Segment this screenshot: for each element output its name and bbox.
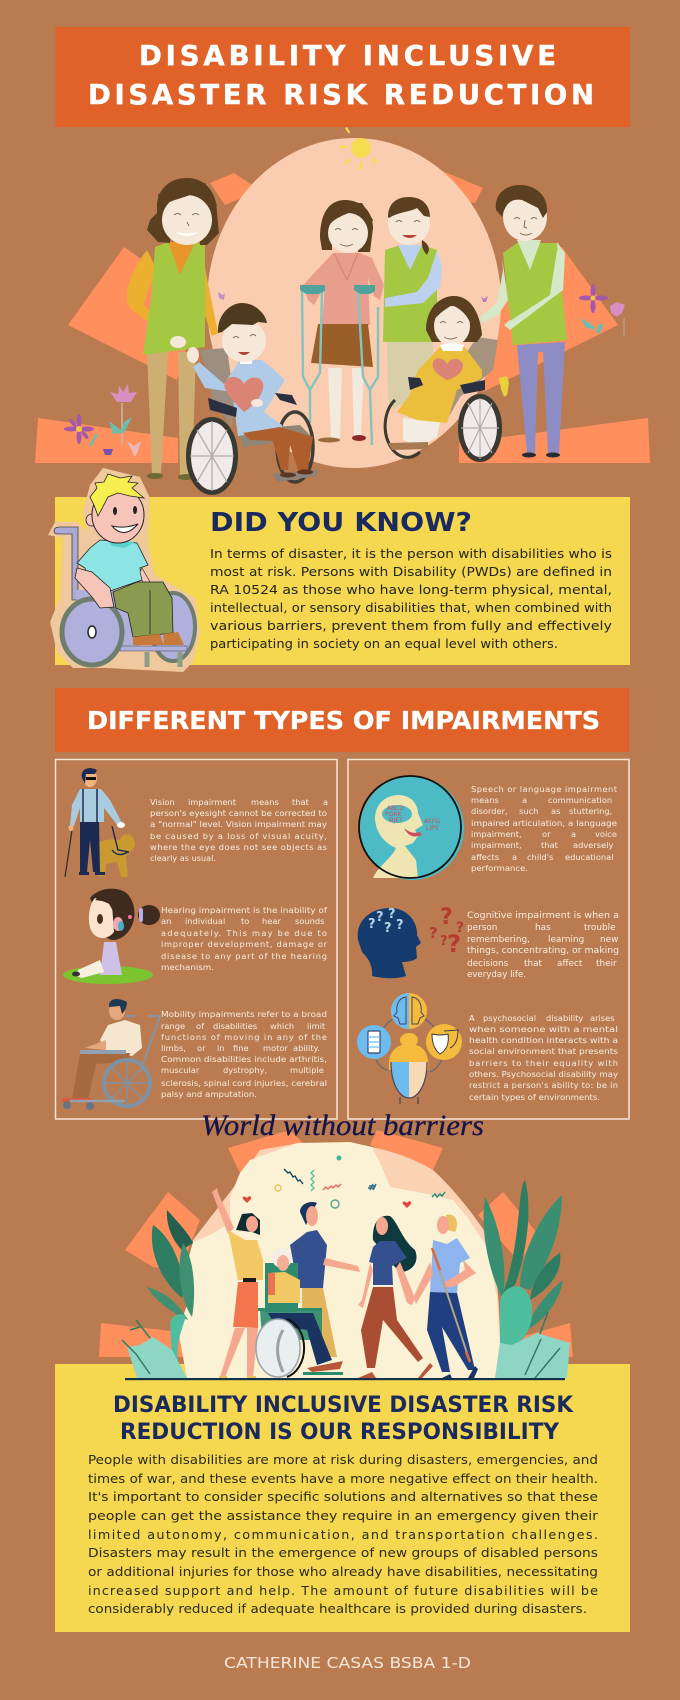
title banner: DISABILITY INCLUSIVE (139, 40, 556, 72)
vision impairment text: clearly as usual. (150, 853, 216, 863)
icon: psychosocial disability head with circles (357, 993, 462, 1104)
hearing impairment text: hear (262, 916, 281, 926)
speech impairment text: performance. (471, 863, 528, 873)
sunburst rays (35, 170, 650, 463)
cognitive impairment text (467, 911, 619, 980)
speech impairment text (471, 784, 618, 873)
psychosocial disability text: disability (546, 1013, 583, 1023)
vision impairment text: impairment (188, 797, 237, 807)
mobility impairment text (161, 1009, 327, 1099)
speech impairment text: communication (548, 795, 612, 805)
responsibility body text: People with disabilities are more at risk during disasters, emergencies, and (88, 1453, 598, 1468)
icon: head with question marks (358, 905, 464, 978)
psychosocial disability text: certain types of environments. (469, 1092, 600, 1102)
speech impairment text: adversely (573, 840, 614, 850)
hearing impairment text: sounds (295, 916, 325, 926)
hearing impairment text: individual (185, 916, 225, 926)
did you know panel (55, 497, 630, 665)
did you know body text: In terms of disaster, it is the person with disabilities who is (210, 547, 612, 561)
peach background shape (187, 1143, 500, 1378)
figure: child in wheelchair with heart (187, 303, 318, 492)
did you know body text: various barriers, prevent them from fully and effectively (210, 619, 612, 633)
left plants (147, 1210, 194, 1320)
icon: speech head in circle (359, 776, 464, 880)
icon: speech head in circle: ABCD (387, 805, 404, 812)
icon: speech head in circle: AEFG (424, 818, 440, 825)
speech impairment text: means (471, 795, 499, 805)
responsibility body text: limited autonomy, communication, and transportation challenges. (88, 1528, 598, 1543)
figure: girl in wheelchair with heart (385, 296, 500, 460)
did you know body text: most at risk. Persons with Disability (PWDs) are defined in (210, 565, 612, 579)
icon: girl with hearing aid (63, 889, 160, 984)
responsibility body text: times of war, and these events have a more negative effect on their health. (88, 1472, 598, 1487)
speech impairment text: as (551, 806, 560, 816)
speech impairment text: voice (595, 829, 617, 839)
icon: head with question marks: ? (447, 930, 461, 958)
icon: head with question marks: ? (440, 905, 453, 930)
mobility impairment text: Common disabilities include arthritis, (161, 1054, 327, 1064)
hearing impairment text: adequately. This may be due to (161, 928, 327, 938)
responsibility body text: or additional injuries for those who already have disabilities, necessitating (88, 1565, 598, 1580)
icon: head with question marks: ? (456, 920, 464, 936)
responsibility body text: It's important to consider specific solutions and alternatives so that these (88, 1490, 598, 1505)
cognitive impairment text: Cognitive impairment is when a (467, 911, 619, 921)
bottom illustration: inclusive group of friends (99, 1130, 573, 1380)
psychosocial disability text: A (469, 1013, 475, 1023)
icon: blind man with guide dog and cane (65, 768, 135, 877)
woman with long hair (358, 1216, 433, 1378)
did you know body text: participating in society on an equal level with others. (210, 637, 558, 651)
author credit: CATHERINE CASAS BSBA 1-D (224, 1654, 471, 1672)
psychosocial disability text: health condition interacts with a (469, 1035, 618, 1045)
vision impairment text: a "normal" level. Vision impairment may (150, 819, 327, 829)
did you know heading: DID YOU KNOW? (210, 508, 472, 538)
confetti (275, 1169, 445, 1208)
psychosocial disability text: others. Psychosocial disability may (469, 1069, 618, 1079)
speech impairment text: Speech or language impairment (471, 784, 618, 794)
flowers (64, 284, 625, 457)
hearing impairment text: Hearing impairment is the inability of (161, 905, 328, 915)
cognitive impairment text: has (535, 923, 551, 933)
responsibility body text: increased support and help. The amount of future disabilities will be (88, 1584, 598, 1599)
cognitive impairment text: things, concentrating, or making (467, 946, 619, 956)
vision impairment text: where the eye does not see objects as (150, 842, 327, 852)
responsibility heading: DISABILITY INCLUSIVE DISASTER RISK (113, 1393, 574, 1418)
mobility impairment text: or (197, 1043, 206, 1053)
woman raising hand (212, 1188, 263, 1379)
hearing impairment text: improper development, damage or (161, 939, 328, 949)
cognitive impairment text: their (596, 959, 617, 969)
mobility impairment text: sclerosis, spinal cord injuries, cerebral (161, 1078, 327, 1088)
sunburst rays (99, 1130, 573, 1357)
mobility impairment text: fine (233, 1043, 249, 1053)
responsibility body text: people can get the assistance they require in an emergency given their (88, 1509, 599, 1524)
speech impairment text: disorder, (471, 806, 508, 816)
vision impairment text: Vision (150, 797, 175, 807)
vision impairment text: that (292, 797, 310, 807)
hearing impairment text: disease to any part of the hearing (161, 951, 327, 961)
did you know body text (210, 547, 612, 651)
icon: head with question marks: ? (384, 921, 392, 936)
speech impairment text: a (522, 795, 527, 805)
vision impairment text: be caused by a loss of visual acuity, (150, 831, 327, 841)
figure: man in green vest (480, 185, 567, 458)
cognitive impairment text: that (524, 959, 543, 969)
blond man with white cane (413, 1214, 478, 1378)
bottom yellow panel background (55, 1364, 630, 1632)
hearing impairment text: mechanism. (161, 962, 214, 972)
cognitive impairment text: new (600, 935, 618, 945)
psychosocial disability text (469, 1013, 618, 1102)
speech impairment text: impaired articulation, a language (471, 818, 617, 828)
panel: vision, hearing and mobility impairments (56, 760, 337, 1119)
psychosocial disability text: restrict a person's ability to: be in (469, 1080, 618, 1090)
icon: head with question marks: ? (368, 917, 376, 932)
responsibility body text (88, 1453, 599, 1617)
title banner (56, 27, 630, 127)
speech impairment text: child's (527, 852, 553, 862)
cognitive impairment text: everyday life. (467, 970, 526, 980)
icon: speech head in circle: LIPS (426, 825, 439, 832)
ground line (125, 1378, 565, 1380)
impairments heading banner (55, 688, 629, 752)
responsibility body text: considerably reduced if adequate healthcare is provided during disasters. (88, 1602, 587, 1617)
figure: woman in green vest (127, 178, 219, 480)
cognitive impairment text: person (467, 923, 497, 933)
icon: boy in wheelchair (48, 468, 200, 672)
did you know body text: intellectual, or sensory disabilities that, when combined with (210, 601, 612, 615)
peach oval (207, 138, 501, 468)
cognitive impairment text: affect (557, 959, 583, 969)
mobility impairment text: range (161, 1021, 185, 1031)
icon: head with question marks: ? (440, 934, 448, 949)
psychosocial disability text: psychosocial (483, 1013, 536, 1023)
mobility impairment text: ability. (293, 1043, 320, 1053)
mobility impairment text: palsy and amputation. (161, 1089, 257, 1099)
psychosocial disability text: social environment that presents (469, 1046, 618, 1056)
psychosocial disability text: arises (590, 1013, 615, 1023)
world without barriers caption: World without barriers (201, 1109, 484, 1142)
hearing impairment text: an (161, 916, 171, 926)
icon: head with question marks: ? (429, 924, 438, 942)
icon: speech head in circle: NJET (389, 817, 403, 824)
speech impairment text: affects (471, 852, 499, 862)
figure: volunteer in green vest with blue shirt (383, 197, 442, 410)
speech impairment text: educational (565, 852, 614, 862)
sun (340, 127, 378, 170)
psychosocial disability text: when someone with a mental (469, 1024, 618, 1034)
wheelchair rider and man standing (256, 1202, 360, 1377)
cream blob (178, 1142, 500, 1378)
title banner: DISASTER RISK REDUCTION (88, 79, 594, 111)
responsibility body text: Disasters may result in the emergence of new groups of disabled persons (88, 1546, 598, 1561)
cognitive impairment text: remembering, (467, 935, 530, 945)
icon: speech head in circle: PQRK (385, 811, 403, 818)
cognitive impairment text: learning (548, 935, 584, 945)
icon: head with question marks: ? (388, 907, 396, 922)
mobility impairment text: limbs, (161, 1043, 186, 1053)
vision impairment text (150, 797, 328, 863)
speech impairment text: stuttering, (569, 806, 612, 816)
mobility impairment text: disabilities (213, 1021, 257, 1031)
mobility impairment text: which (270, 1021, 294, 1031)
psychosocial disability text: barriers to their equality with (469, 1058, 618, 1068)
vision impairment text: a (323, 797, 328, 807)
speech impairment text: impairment, (471, 829, 522, 839)
mobility impairment text: functions of moving in any of the (161, 1032, 327, 1042)
mobility impairment text: multiple (290, 1065, 324, 1075)
mobility impairment text: Mobility impairments refer to a broad (161, 1009, 327, 1019)
cognitive impairment text: decisions (467, 959, 509, 969)
speech impairment text: impairment, (471, 840, 522, 850)
icon: head with question marks: ? (376, 910, 384, 925)
mobility impairment text: muscular (161, 1065, 200, 1075)
mobility impairment text: of (196, 1021, 205, 1031)
panel: speech, cognitive and psychosocial impairments (348, 760, 629, 1119)
speech impairment text: a (571, 829, 576, 839)
right plants (484, 1180, 563, 1330)
speech impairment text: such (519, 806, 538, 816)
cognitive impairment text: trouble (584, 923, 616, 933)
impairments heading banner: DIFFERENT TYPES OF IMPAIRMENTS (87, 706, 600, 735)
hearing impairment text (161, 905, 328, 972)
vision impairment text: means (251, 797, 279, 807)
icon: man in wheelchair (62, 999, 160, 1110)
hero illustration: volunteers and people with disabilities (35, 127, 650, 492)
speech impairment text: a (512, 852, 517, 862)
figure: woman on crutches (300, 200, 384, 445)
did you know body text: RA 10524 as those who have long-term physical, mental, (210, 583, 612, 597)
responsibility heading (113, 1393, 574, 1445)
responsibility heading: REDUCTION IS OUR RESPONSIBILITY (120, 1420, 560, 1445)
icon: head with question marks: ? (396, 918, 404, 933)
hearing impairment text: to (241, 916, 249, 926)
vision impairment text: person's eyesight cannot be corrected to (150, 808, 327, 818)
mobility impairment text: dystrophy, (223, 1065, 267, 1075)
mobility impairment text: limit (307, 1021, 326, 1031)
speech impairment text: that (541, 840, 559, 850)
mobility impairment text: motor (263, 1043, 288, 1053)
speech impairment text: or (542, 829, 551, 839)
mobility impairment text: in (217, 1043, 225, 1053)
